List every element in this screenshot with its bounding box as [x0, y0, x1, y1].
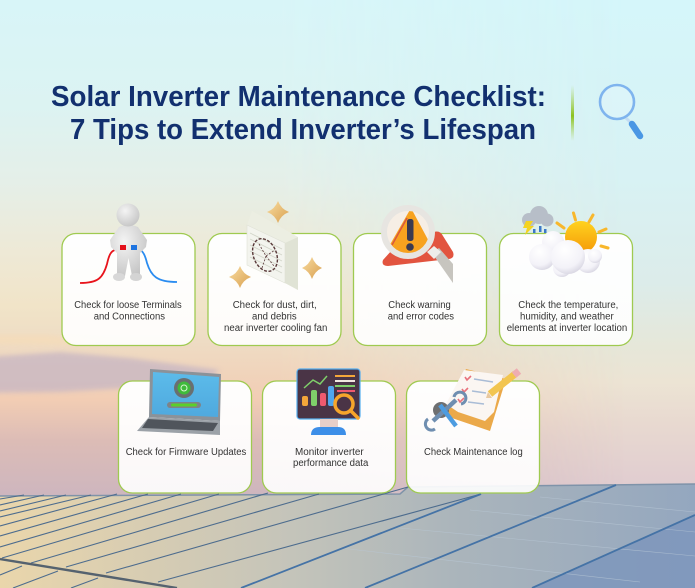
panel: warning and error codes — [354, 208, 486, 346]
caption: humidity, and weather — [520, 312, 614, 322]
caption: elements at inverter location — [507, 323, 627, 334]
card box — [500, 234, 632, 346]
card box — [62, 234, 195, 346]
caption: and error codes — [388, 312, 454, 322]
panel: loose terminals — [62, 204, 195, 346]
caption: and debris — [252, 312, 297, 322]
caption: Check for Firmware Updates — [126, 447, 246, 458]
caption — [74, 300, 182, 322]
card box — [406, 381, 540, 493]
solar panels — [0, 484, 695, 588]
caption: near inverter cooling fan — [224, 323, 327, 334]
icon: blue magnifier — [600, 85, 640, 136]
caption — [388, 300, 454, 322]
divider: green vertical bar — [571, 85, 574, 141]
icon: figure holding red and blue cables — [80, 204, 177, 283]
icon: laptop with update gear — [137, 369, 221, 435]
icon: checklist, pencil and tools — [425, 369, 519, 431]
caption: Check the temperature, — [518, 300, 618, 311]
caption: performance data — [293, 458, 369, 469]
caption: Check warning — [388, 300, 451, 311]
caption: Check for dust, dirt, — [233, 300, 317, 311]
card box — [118, 381, 252, 493]
panel: dust near cooling fan — [208, 201, 341, 346]
card box — [262, 381, 396, 493]
caption — [507, 300, 627, 334]
icon: warning triangle under magnifier — [380, 208, 454, 283]
caption: and Connections — [94, 312, 165, 322]
panel: firmware updates — [118, 369, 252, 493]
caption — [224, 300, 327, 334]
caption: Monitor inverter — [295, 447, 364, 458]
icon: sun, clouds and storm cloud — [522, 206, 608, 277]
panel: performance data — [262, 369, 396, 493]
title: 7 Tips to Extend Inverter’s Lifespan — [70, 114, 536, 146]
card box — [208, 234, 341, 346]
icon: monitor with charts and magnifier — [297, 369, 360, 435]
title: Solar Inverter Maintenance Checklist: — [51, 81, 546, 113]
caption: Check Maintenance log — [424, 447, 523, 458]
icon: cooling fan vent with sparkles — [229, 201, 322, 290]
panel: temperature, humidity and weather — [500, 206, 632, 346]
background: sky and clouds — [0, 106, 695, 496]
caption — [293, 447, 369, 469]
title — [51, 81, 546, 146]
panel: maintenance log — [406, 369, 540, 493]
card box — [354, 234, 486, 346]
caption: Check for loose Terminals — [74, 300, 182, 311]
